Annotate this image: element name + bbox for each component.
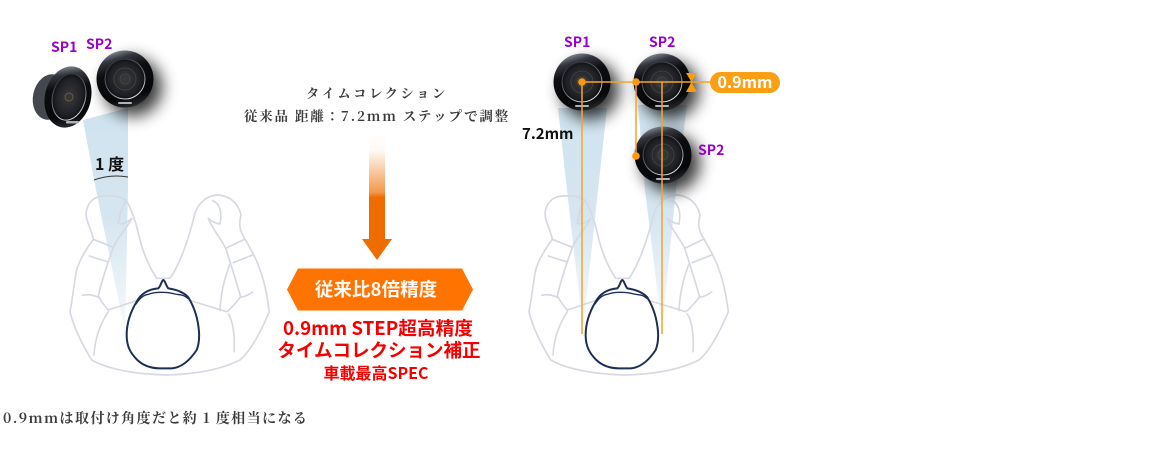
value pill 0.9mm: 0.9mm: [718, 69, 772, 93]
listener figure, right: [529, 195, 728, 375]
footnote: 0.9mmは取付け角度だと約 1 度相当になる: [3, 408, 308, 428]
speaker SP1: [554, 54, 619, 119]
speaker SP1 angled: [29, 61, 98, 133]
listener figure, left: [70, 195, 269, 375]
label SP2 lower: SP2: [698, 140, 724, 160]
red claim text: 車載最高SPEC: [324, 360, 429, 384]
red claim text: [277, 314, 481, 384]
speaker SP2 facing: [96, 50, 162, 116]
middle heading: time correction: [244, 83, 510, 125]
red claim text: タイムコレクション補正: [277, 337, 481, 363]
badge: eight times precision: [287, 268, 473, 310]
red claim text: 0.9mm STEP超高精度: [283, 314, 473, 341]
speaker SP2: [634, 54, 699, 119]
down arrow: [362, 135, 392, 260]
angle label: 1 degree: 1 度: [95, 151, 124, 175]
middle heading: time correction: 従来品 距離：7.2mm ステップで調整: [244, 105, 510, 125]
measure dots: [578, 78, 640, 160]
label 7.2mm: 7.2mm: [522, 123, 574, 144]
angle arc: [94, 176, 128, 180]
sound beam from SP2 to listener: [83, 108, 128, 332]
label SP2: SP2: [86, 34, 112, 54]
label SP1: SP1: [51, 37, 77, 57]
label SP2 top: SP2: [649, 32, 675, 52]
speaker SP2 moved: [634, 126, 700, 192]
sound beam SP1: [558, 108, 607, 330]
middle heading: time correction: タイムコレクション: [306, 83, 448, 102]
left diagram: speakers angled toward listener: [29, 34, 269, 375]
sound beam SP2: [638, 105, 687, 330]
badge: eight times precision: 従来比8倍精度: [315, 275, 438, 302]
hourglass marker: [686, 73, 697, 92]
measure lines: [582, 82, 712, 334]
label SP1: SP1: [564, 32, 590, 52]
right diagram: time correction geometry: [522, 32, 780, 375]
